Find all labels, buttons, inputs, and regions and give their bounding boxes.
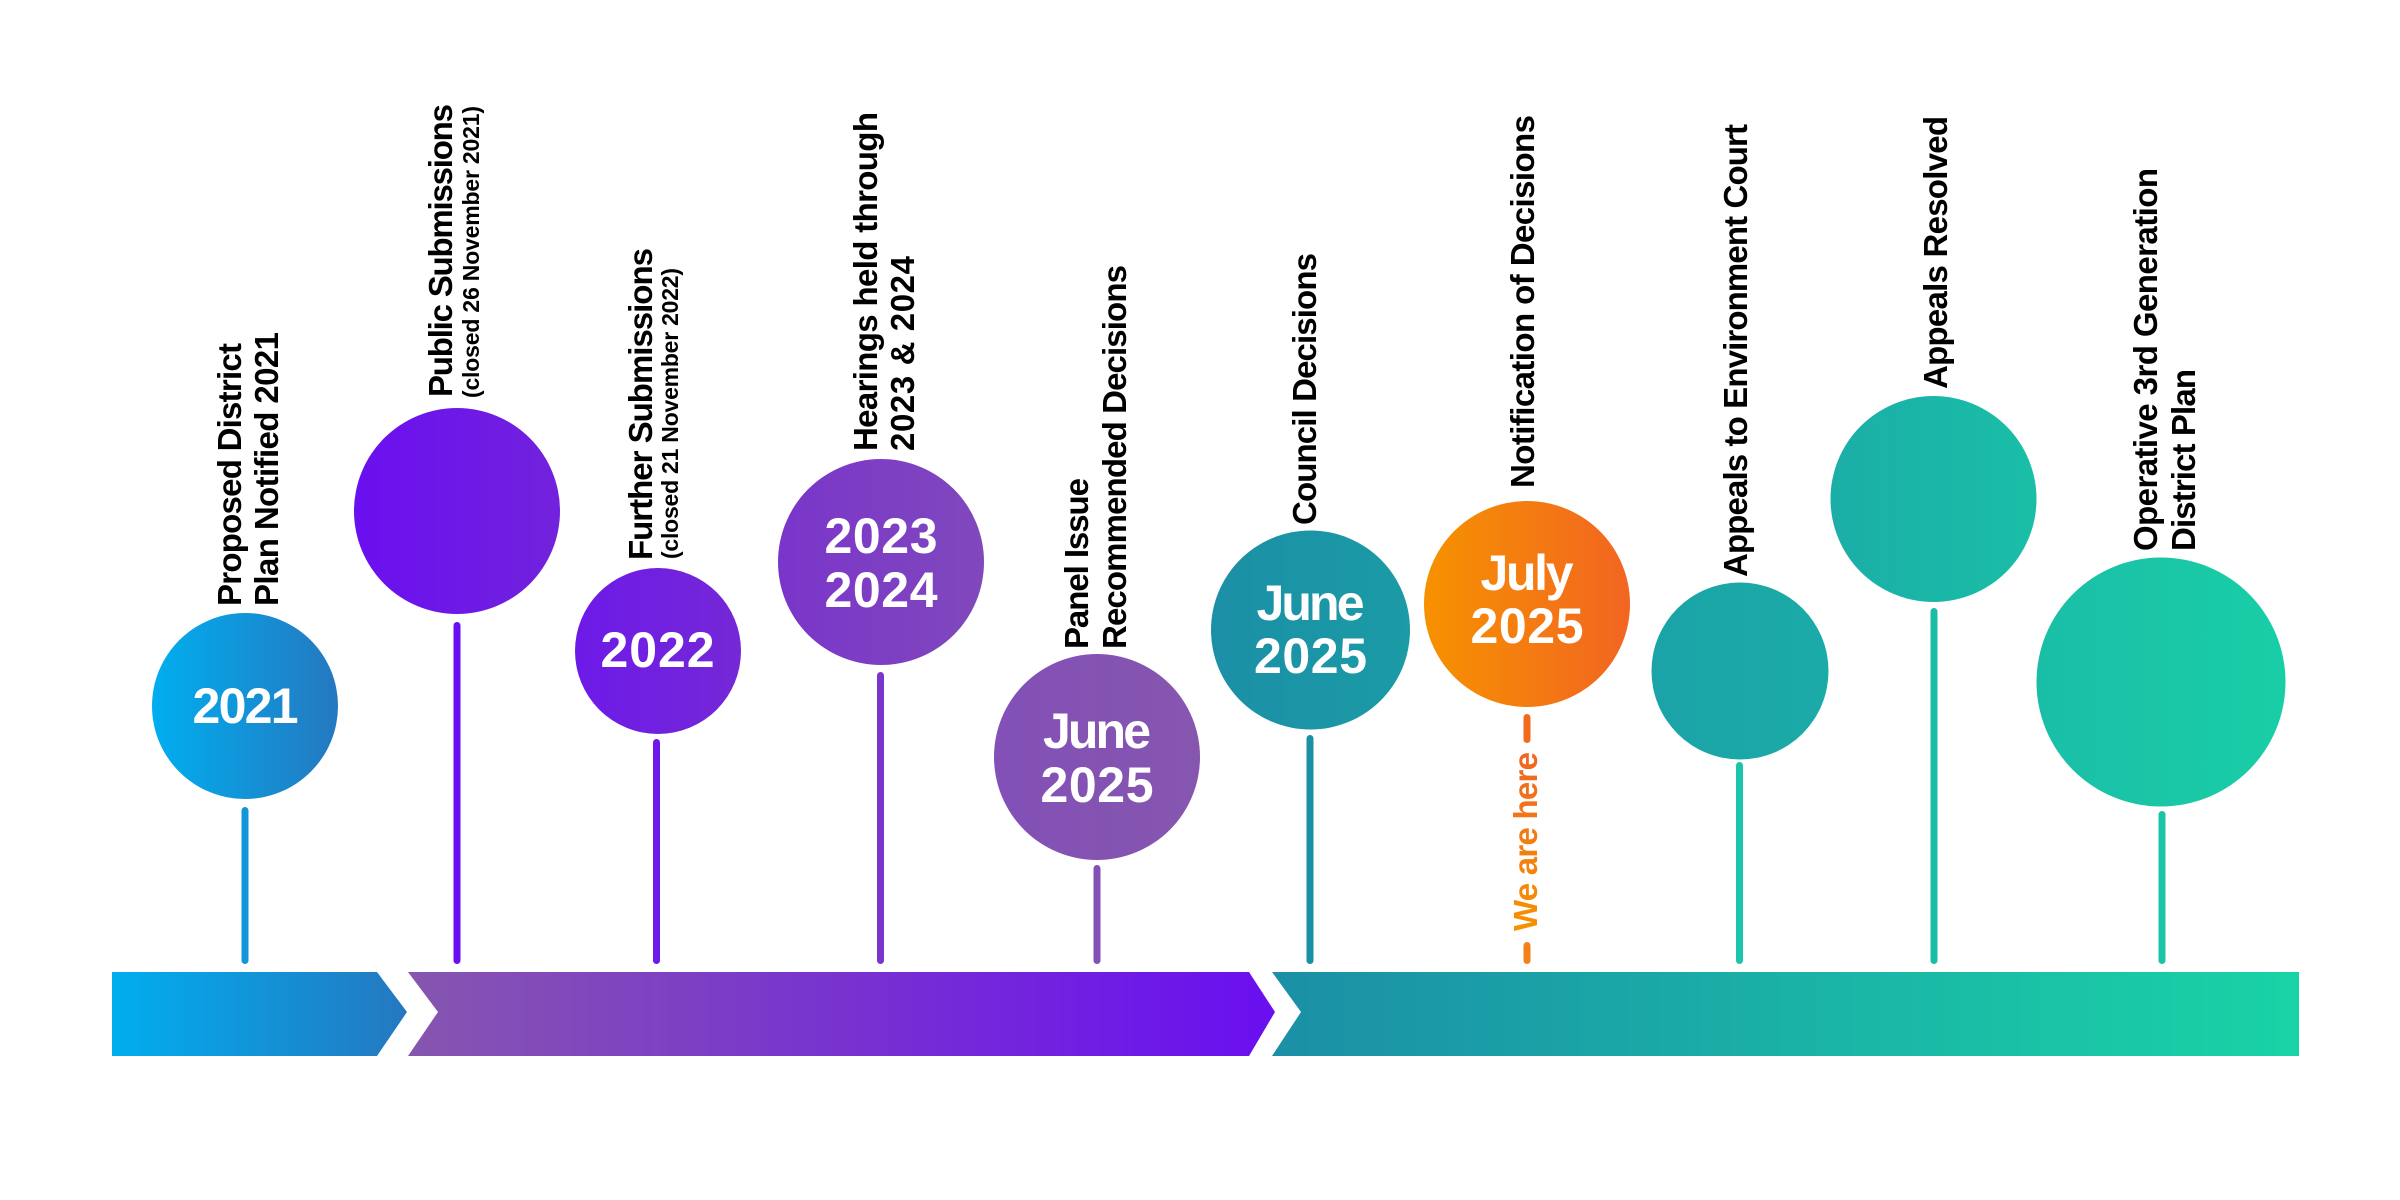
milestone: Public Submissions: [354, 104, 560, 964]
milestone: Hearings 2023 and 2024: Hearings held through: [847, 112, 884, 451]
arrow segment: submissions and hearings: [408, 972, 1275, 1056]
milestone: Proposed District Plan Notified 2021: [152, 332, 338, 964]
arrow segment: decisions to operative plan: [1272, 972, 2299, 1056]
milestone: Further Submissions 2022: 2022: [600, 622, 714, 678]
milestone: Hearings 2023 and 2024: [778, 112, 984, 964]
milestone: Hearings 2023 and 2024: 2024: [824, 562, 938, 618]
milestone: Operative 3rd Generation District Plan: Operative 3rd Generation: [2127, 168, 2164, 551]
milestone: Operative 3rd Generation District Plan: [2036, 168, 2286, 964]
milestone: Proposed District Plan Notified 2021: Plan Notified 2021: [248, 332, 285, 606]
milestone: Council Decisions: June: [1256, 575, 1364, 631]
arrow segment: 2021: [112, 972, 407, 1056]
milestone: Council Decisions: 2025: [1254, 628, 1367, 684]
milestone: Appeals to Environment Court: [1652, 124, 1828, 964]
milestone: Public Submissions: (closed 26 November 2021): [458, 106, 484, 398]
milestone: Further Submissions 2022: Further Submissions: [622, 248, 659, 560]
milestone: Public Submissions: Public Submissions: [422, 104, 459, 397]
milestone: Further Submissions 2022: [575, 248, 741, 964]
milestone: Panel Issue Recommended Decisions: 2025: [1040, 757, 1154, 813]
milestone: Notification of Decisions, July 2025: July: [1480, 545, 1574, 601]
milestone: Proposed District Plan Notified 2021: Proposed District: [211, 343, 248, 606]
milestone: Operative 3rd Generation District Plan: District Plan: [2165, 369, 2202, 551]
milestone: Appeals Resolved: Appeals Resolved: [1917, 116, 1954, 389]
we are here marker: We are here: [1507, 752, 1544, 931]
milestone: Notification of Decisions, July 2025: [1424, 115, 1630, 964]
milestone: Notification of Decisions, July 2025: Notification of Decisions: [1504, 115, 1541, 488]
milestone: Further Submissions 2022: (closed 21 November 2022): [657, 268, 683, 559]
milestone: Council Decisions: Council Decisions: [1286, 253, 1323, 525]
milestone: Panel Issue Recommended Decisions: Recommended Decisions: [1096, 265, 1133, 649]
milestone: Appeals to Environment Court: Appeals to Environment Court: [1717, 124, 1754, 577]
milestone: Proposed District Plan Notified 2021: 2021: [192, 678, 298, 734]
milestone: Notification of Decisions, July 2025: 2025: [1470, 598, 1584, 654]
milestone: Appeals Resolved: [1830, 116, 2036, 964]
milestone: Hearings 2023 and 2024: 2023 & 2024: [884, 255, 921, 451]
milestone: Panel Issue Recommended Decisions: June: [1043, 703, 1151, 759]
milestone: Hearings 2023 and 2024: 2023: [824, 508, 938, 564]
milestone: Council Decisions: [1211, 253, 1410, 964]
milestone: Panel Issue Recommended Decisions: [994, 265, 1200, 964]
milestone: Panel Issue Recommended Decisions: Panel Issue: [1058, 478, 1095, 649]
